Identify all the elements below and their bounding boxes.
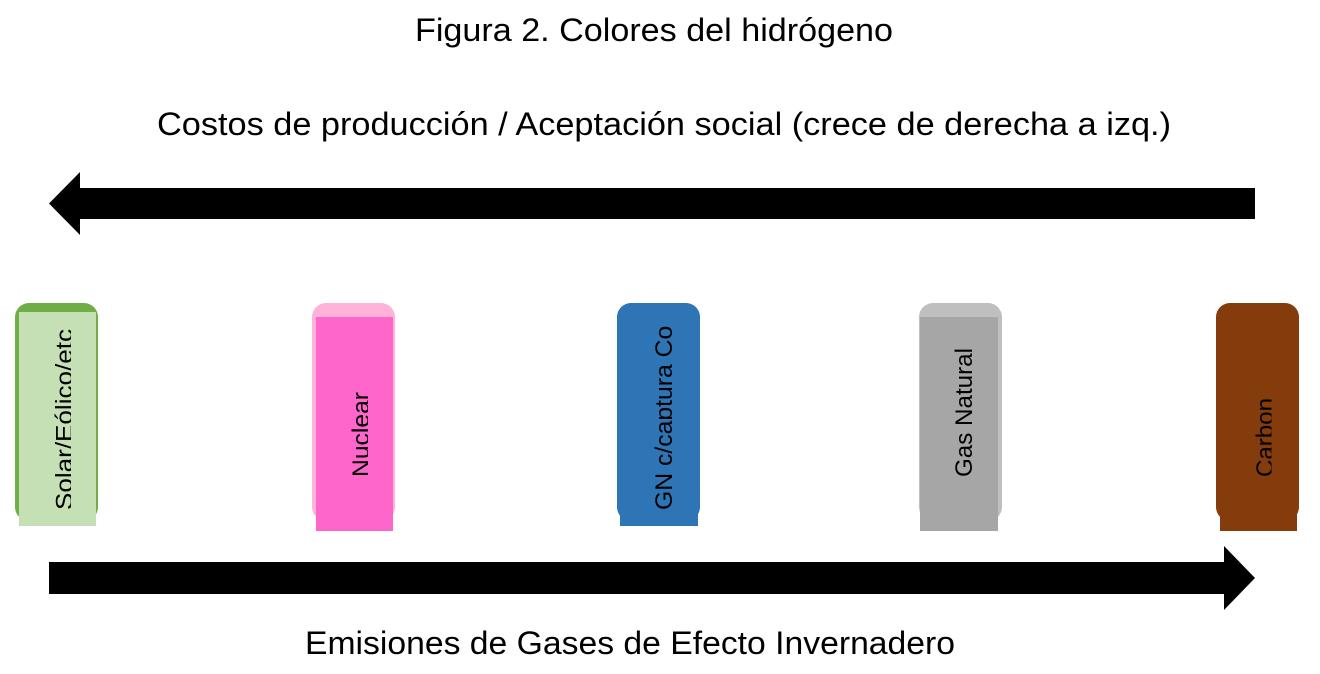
heading: production costs and social acceptance: Costos de producción / Aceptación social (crece de derecha a izq.): [157, 106, 1171, 142]
bar: Nuclear: Nuclear: [348, 392, 375, 477]
caption: greenhouse gas emissions: Emisiones de Gases de Efecto Invernadero: [305, 625, 955, 661]
bar: GN con captura de CO2: [617, 303, 700, 526]
bar: Gas Natural: Gas Natural: [951, 348, 978, 477]
arrow: pointing left: [49, 172, 1255, 235]
bar: GN con captura de CO2: GN c/captura Co2: [651, 312, 678, 510]
bar: Solar/Eólico/etc: [15, 303, 98, 526]
bar: Nuclear: [312, 303, 395, 531]
bar: Carbon: [1216, 303, 1299, 531]
bar: Gas Natural: [919, 303, 1002, 531]
title: Figura 2. Colores del hidrógeno: [415, 12, 893, 48]
arrow: pointing right: [49, 546, 1255, 610]
bar: Carbon: Carbon: [1252, 398, 1279, 477]
bar: Solar/Eólico/etc: Solar/Eólico/etc: [52, 329, 78, 510]
